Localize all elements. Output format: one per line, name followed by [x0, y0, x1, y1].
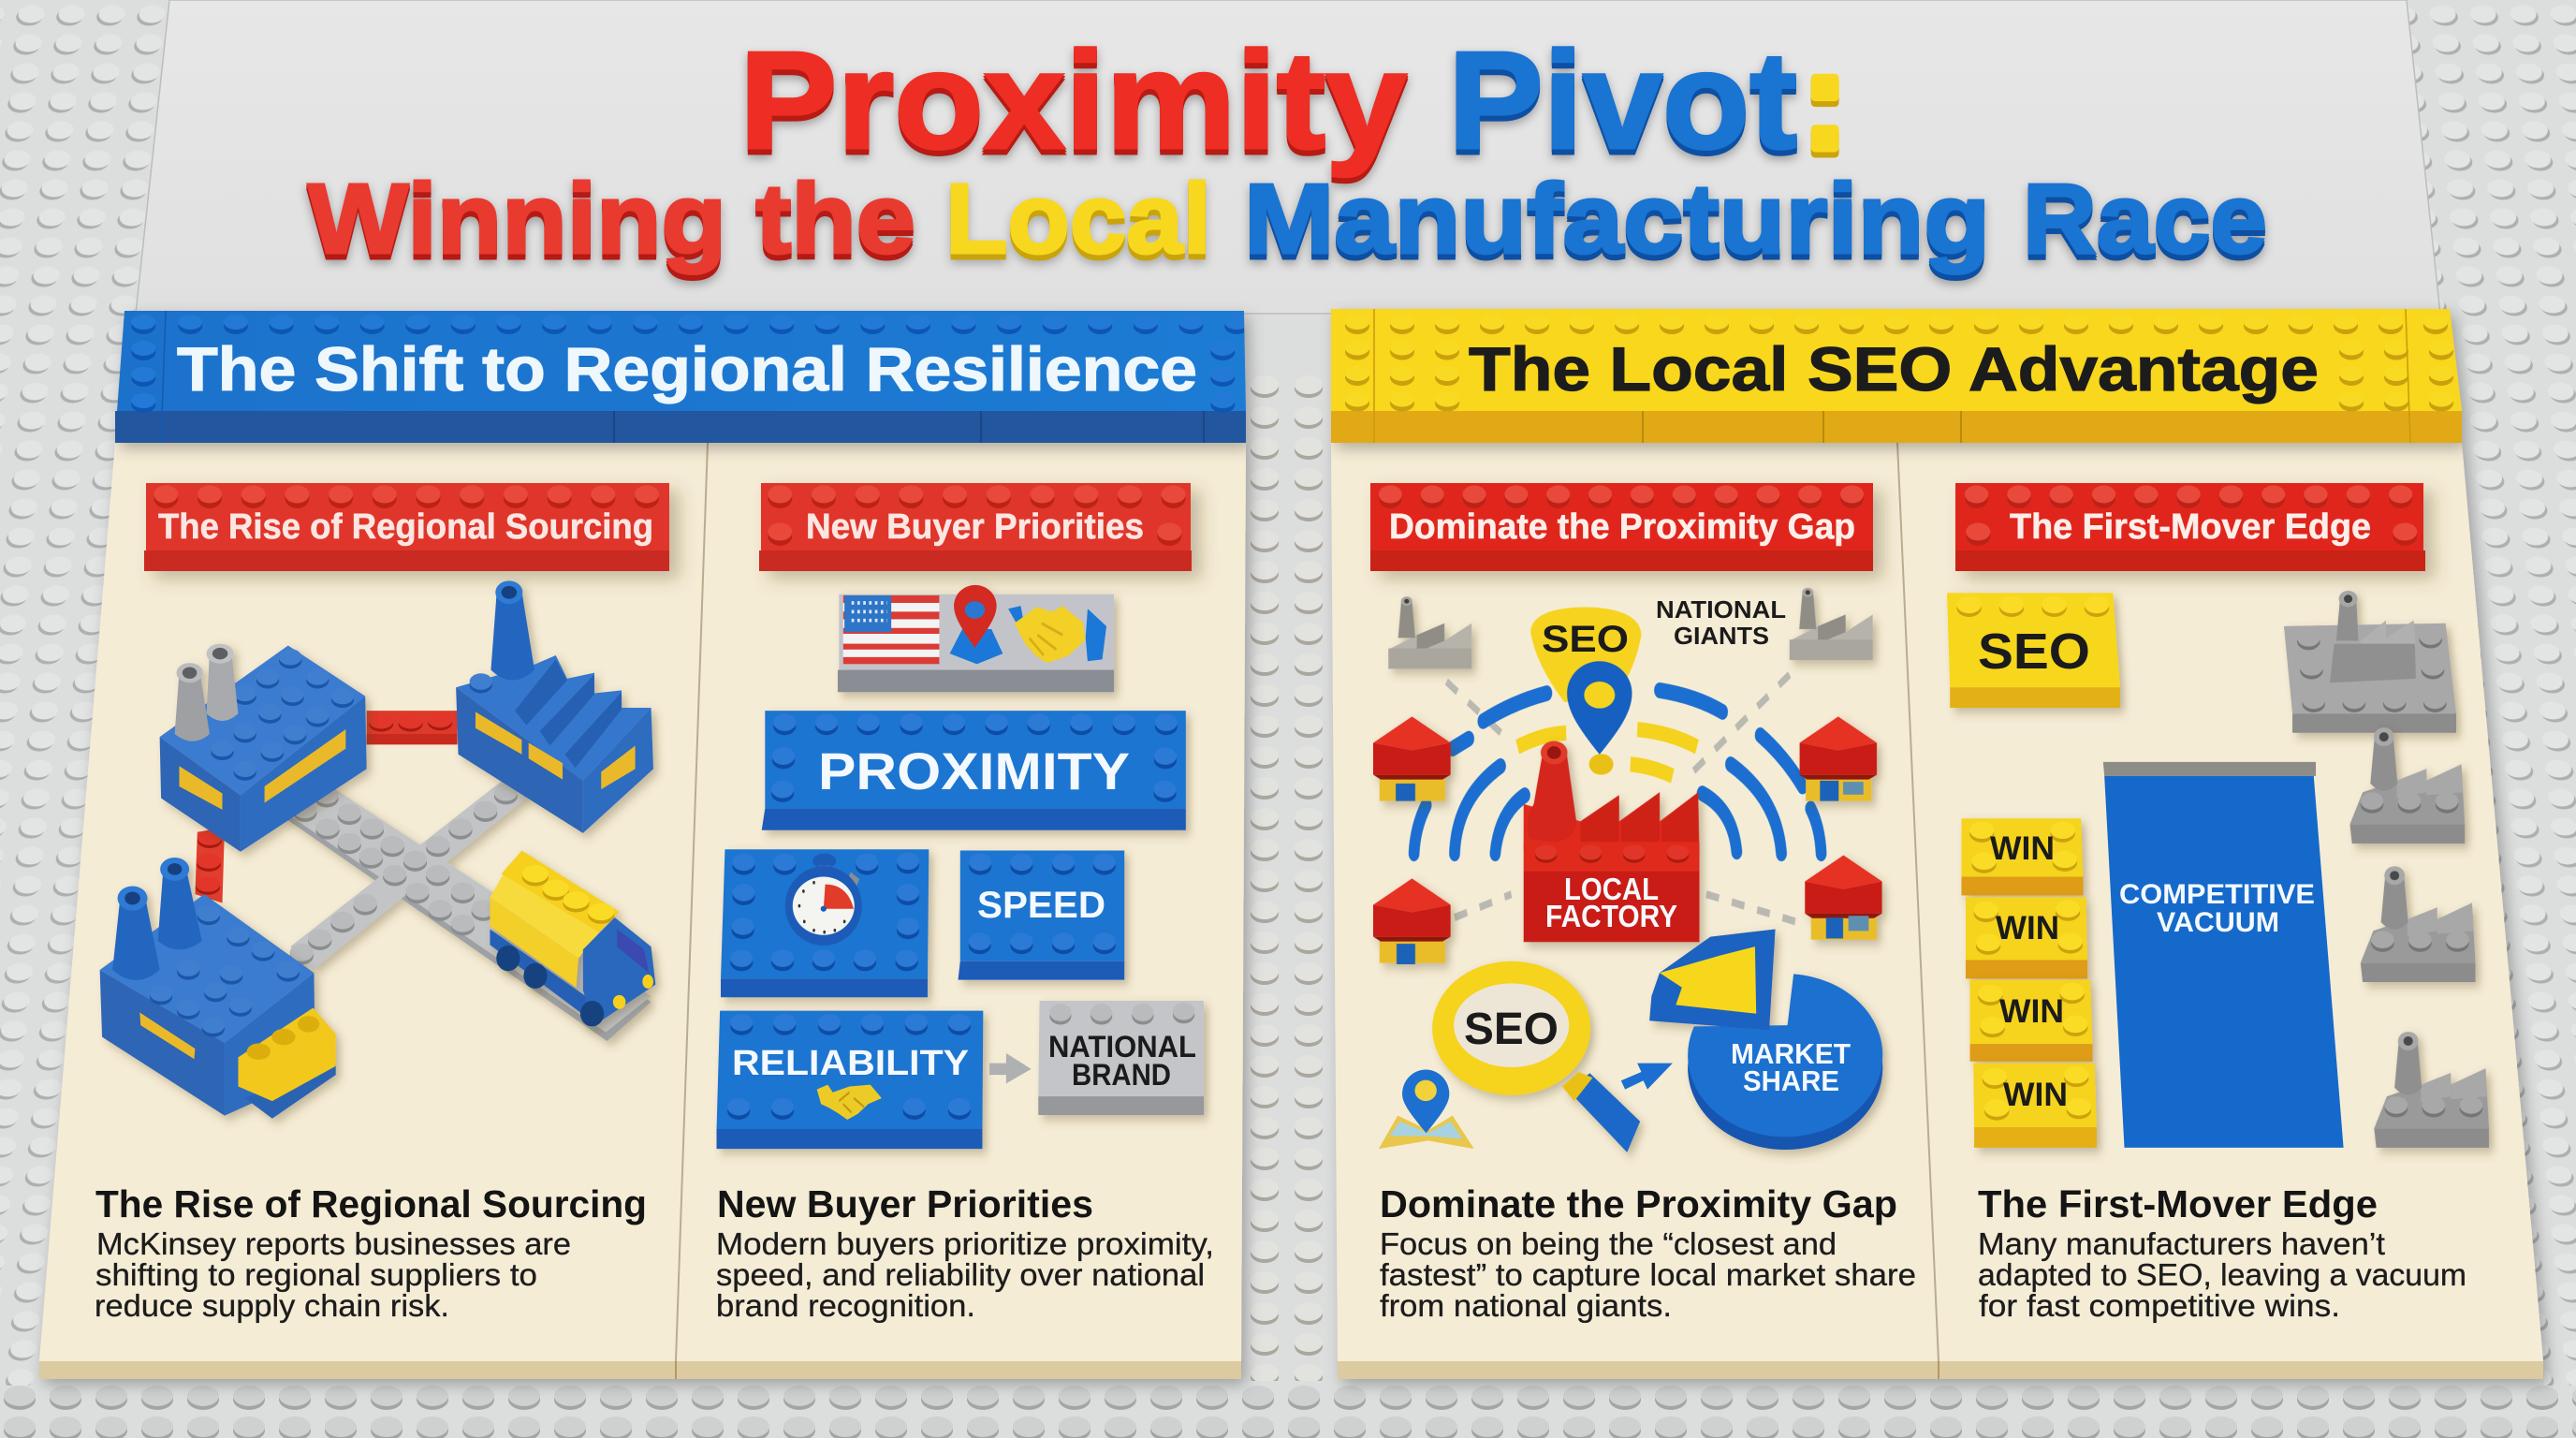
label: local factory: LOCAL: [1564, 872, 1659, 906]
illustration: local factory proximity map: [1373, 588, 1882, 1152]
brick: speed: [959, 850, 1124, 980]
title line 2: Manufacturing: [1244, 164, 1990, 274]
panel: right cream board: [1331, 443, 2543, 1379]
text block: The First-Mover Edge: The First-Mover Edge: [1978, 1182, 2378, 1225]
title line 1: :: [1802, 23, 1848, 178]
factory: top-right: [456, 580, 653, 833]
label: SEO brick: SEO: [1978, 624, 2090, 680]
red local factory: [1524, 741, 1699, 942]
map pin on map: [1379, 1069, 1474, 1149]
win brick 2: [1966, 897, 2087, 978]
labels: win: WIN: [1990, 830, 2055, 867]
sub-heading brick: New Buyer Priorities: [758, 482, 1195, 571]
title line 1: [739, 23, 1848, 178]
brick: proximity: [762, 711, 1186, 830]
illustration: buyer priorities bricks: [717, 585, 1204, 1149]
title line 1: Pivot: [1448, 23, 1797, 178]
text block: New Buyer Priorities: New Buyer Priorities: [717, 1182, 1093, 1225]
text block: New Buyer Priorities: Modern buyers prioritize proximity,: [716, 1226, 1214, 1261]
grey plate factory: [2284, 591, 2456, 733]
label: proximity: PROXIMITY: [818, 741, 1130, 800]
factory: top-left: [160, 644, 367, 852]
labels: win: WIN: [1996, 910, 2059, 946]
text block: Dominate the Proximity Gap: from national giants.: [1380, 1288, 1672, 1323]
title line 2: Local: [945, 164, 1211, 274]
labels: win: WIN: [2003, 1077, 2068, 1113]
label: speed: SPEED: [977, 885, 1105, 926]
icon tile: flag, pin, handshake: [838, 585, 1114, 692]
text block: The Rise of Regional Sourcing: shifting to regional suppliers to: [95, 1257, 537, 1292]
labels: win: [1990, 830, 2068, 1113]
label: market share: [1731, 1037, 1851, 1097]
road bricks: [282, 776, 651, 1041]
label: market share: MARKET: [1731, 1037, 1851, 1070]
label: national brand: NATIONAL: [1048, 1030, 1196, 1064]
label: local factory: [1545, 872, 1677, 933]
text block: Dominate the Proximity Gap: fastest” to capture local market share: [1380, 1257, 1916, 1292]
label: competitive vacuum: VACUUM: [2157, 907, 2279, 938]
heading brick: The Local SEO Advantage: The Local SEO Advantage: [1469, 334, 2319, 404]
text block: Dominate the Proximity Gap: [1380, 1182, 1916, 1323]
competitive vacuum: [2103, 762, 2344, 1148]
illustration: first-mover edge: [1947, 591, 2489, 1148]
sub-heading brick: The Rise of Regional Sourcing: [144, 482, 669, 571]
sub-heading brick: Dominate the Proximity Gap: Dominate the Proximity Gap: [1389, 507, 1855, 547]
text block: The First-Mover Edge: adapted to SEO, leaving a vacuum: [1978, 1257, 2466, 1292]
heading brick: The Shift to Regional Resilience: [115, 310, 1246, 443]
text block: The Rise of Regional Sourcing: The Rise of Regional Sourcing: [95, 1182, 647, 1225]
label: national brand: [1048, 1030, 1196, 1092]
win brick 4: [1973, 1064, 2097, 1148]
title line 2: Winning the: [308, 164, 915, 274]
national giant factories: [1388, 588, 1873, 668]
win bricks: [1961, 818, 2097, 1148]
label: national brand: BRAND: [1072, 1058, 1171, 1092]
win brick 1: [1961, 818, 2083, 895]
text block: Dominate the Proximity Gap: Focus on being the “closest and: [1380, 1226, 1837, 1261]
houses: [1373, 716, 1882, 964]
SEO location marker: [1530, 607, 1641, 775]
dashed grey links: [1446, 675, 1795, 921]
label: SEO magnifier: SEO: [1464, 1005, 1559, 1054]
label: SEO marker: SEO: [1542, 619, 1629, 660]
win brick 3: [1970, 980, 2092, 1062]
yellow arcs: [1517, 729, 1697, 776]
title: [308, 23, 2267, 274]
label: local factory: FACTORY: [1545, 899, 1677, 933]
brick: SEO: [1947, 593, 2120, 708]
text block: The First-Mover Edge: Many manufacturers haven’t: [1978, 1226, 2385, 1261]
title line 2: Race: [2023, 164, 2267, 274]
sub-heading brick: The Rise of Regional Sourcing: The Rise of Regional Sourcing: [158, 507, 653, 547]
text block: Dominate the Proximity Gap: Dominate the Proximity Gap: [1380, 1182, 1897, 1225]
market share pie: [1649, 929, 1882, 1150]
grey factories: [2349, 727, 2489, 1148]
label: national giants: GIANTS: [1674, 622, 1769, 650]
text block: New Buyer Priorities: [716, 1182, 1214, 1323]
text block: The Rise of Regional Sourcing: reduce supply chain risk.: [95, 1288, 449, 1323]
text block: New Buyer Priorities: speed, and reliability over national: [716, 1257, 1205, 1292]
label: competitive vacuum: [2119, 879, 2315, 938]
label: competitive vacuum: COMPETITIVE: [2119, 879, 2315, 910]
heading brick: The Local SEO Advantage: [1331, 309, 2464, 443]
brick: reliability: [717, 1011, 983, 1149]
factory: bottom-left with yellow bricks: [100, 858, 336, 1119]
title line 1: Proximity: [739, 23, 1407, 178]
text block: The First-Mover Edge: for fast competitive wins.: [1979, 1288, 2340, 1323]
brick: stopwatch: [721, 849, 929, 997]
brick: national brand: [1038, 1001, 1204, 1115]
label: national giants: NATIONAL: [1656, 595, 1786, 624]
label: national giants: [1656, 595, 1786, 650]
text block: The Rise of Regional Sourcing: McKinsey reports businesses are: [96, 1226, 571, 1261]
label: reliability: RELIABILITY: [732, 1044, 969, 1083]
label: market share: SHARE: [1743, 1064, 1839, 1097]
title line 2: [308, 164, 2267, 274]
illustration: regional supply network: [100, 580, 655, 1119]
arrow to market share: [1621, 1064, 1673, 1090]
labels: win: WIN: [1999, 993, 2064, 1030]
panel: left cream board: [39, 443, 1246, 1379]
text block: The First-Mover Edge: [1978, 1182, 2466, 1323]
signal arcs: [1414, 690, 1822, 854]
text block: The Rise of Regional Sourcing: [95, 1182, 647, 1323]
red connector bricks: [195, 711, 458, 902]
sub-heading brick: The First-Mover Edge: [1955, 482, 2427, 571]
heading brick: The Shift to Regional Resilience: The Shift to Regional Resilience: [177, 334, 1197, 404]
magnifier: [1432, 961, 1640, 1152]
text block: New Buyer Priorities: brand recognition.: [716, 1288, 975, 1323]
title plate: [136, 0, 2440, 314]
sub-heading brick: New Buyer Priorities: New Buyer Priorities: [806, 507, 1144, 547]
truck: [490, 850, 655, 1026]
sub-heading brick: The First-Mover Edge: The First-Mover Edge: [2010, 507, 2371, 547]
sub-heading brick: Dominate the Proximity Gap: [1369, 482, 1873, 571]
arrow: [989, 1053, 1032, 1083]
